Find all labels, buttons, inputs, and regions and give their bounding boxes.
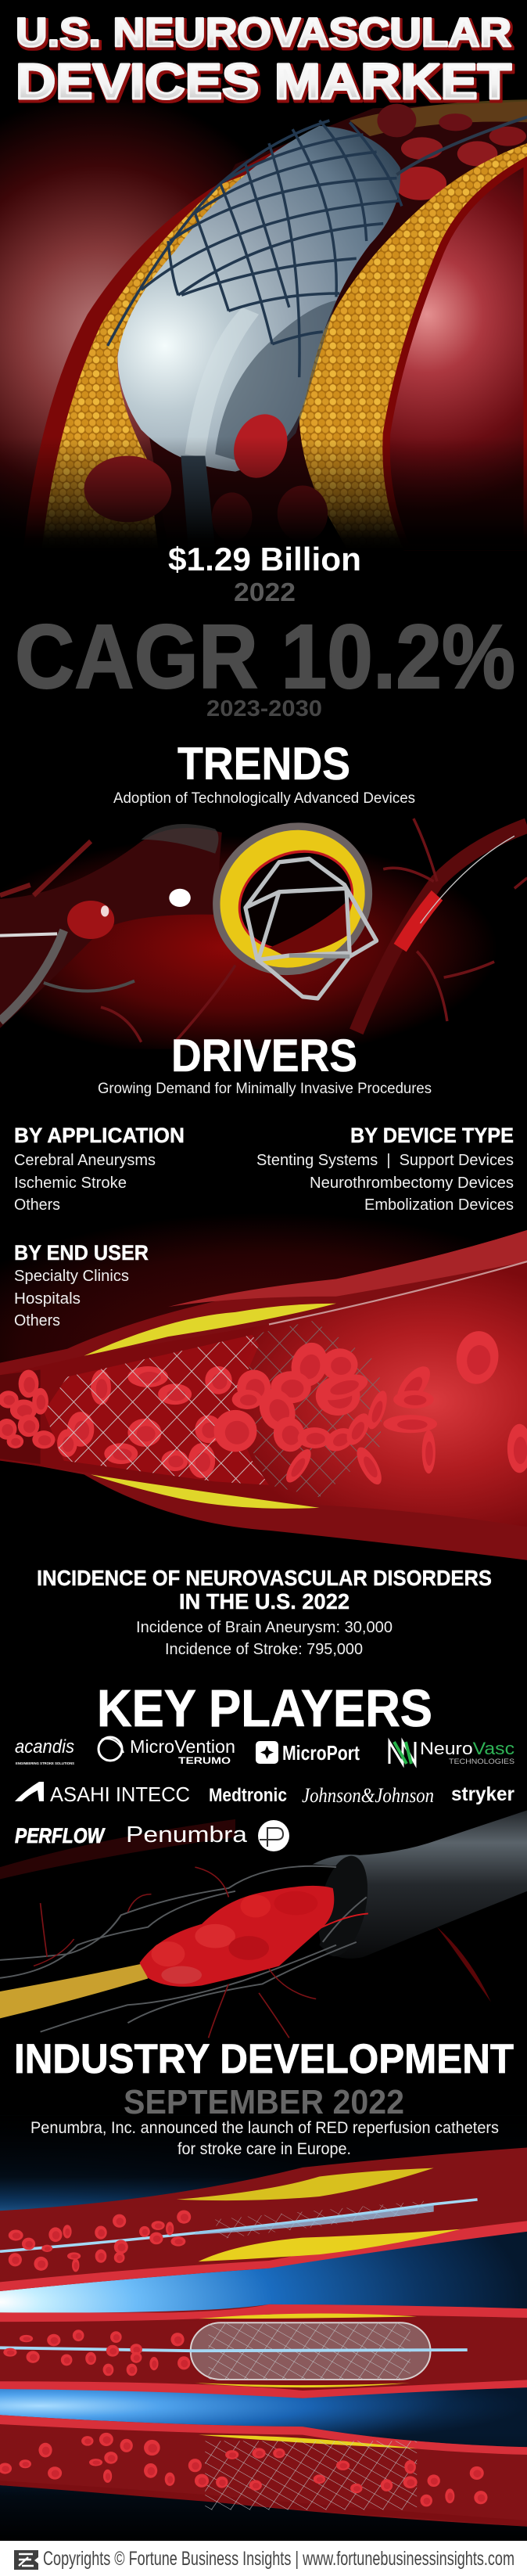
logo: MicroVention Terumo (99, 1736, 235, 1766)
heading: drivers: DRIVERS (171, 1031, 357, 1081)
title: U.S. NEUROVASCULAR (16, 10, 511, 56)
drivers text: Growing Demand for Minimally Invasive Procedures (98, 1081, 432, 1097)
logo: acandis: acandis (15, 1736, 74, 1758)
segment: by end user (14, 1241, 149, 1329)
blood cells (0, 1328, 527, 1488)
segment: by application: Ischemic Stroke (14, 1175, 127, 1192)
development text: Penumbra, Inc. announced the launch of RED reperfusion catheters (30, 2119, 499, 2137)
heading: key players: KEY PLAYERS (97, 1679, 432, 1738)
logo: NeuroVasc Technologies: Neuro Vasc (420, 1739, 514, 1758)
incidence block: IN THE U.S. 2022 (179, 1589, 350, 1614)
incidence block: INCIDENCE OF NEUROVASCULAR DISORDERS (37, 1566, 492, 1590)
logo: NeuroVasc Technologies: TECHNOLOGIES (449, 1758, 514, 1765)
segment: by device type: Neurothrombectomy Devices (310, 1175, 514, 1192)
market size value: $1.29 Billion (168, 541, 361, 577)
catheter tube (313, 1810, 527, 1959)
development text (30, 2119, 499, 2158)
stent mesh (37, 1318, 390, 1502)
right artery branches (101, 818, 527, 1042)
logo: acandis (15, 1736, 74, 1765)
forecast period: 2023-2030 (206, 696, 322, 721)
logo: acandis: ENGINEERING STROKE SOLUTIONS (16, 1761, 74, 1765)
incidence block: Incidence of Stroke: 795,000 (165, 1641, 363, 1658)
heading: trends: TRENDS (177, 739, 350, 790)
segment: by end user: Others (14, 1312, 60, 1329)
wire cage (0, 1866, 367, 2032)
illustration: clot retrieval catheter (0, 1810, 527, 2038)
segment: by end user: Specialty Clinics (14, 1268, 129, 1285)
segment: by end user: BY END USER (14, 1241, 149, 1265)
logo: Medtronic: Medtronic (209, 1785, 287, 1806)
logo: Johnson and Johnson: Johnson&Johnson (302, 1784, 434, 1807)
logo: Perflow: PERFLOW (15, 1824, 106, 1847)
segment: by application: Cerebral Aneurysms (14, 1152, 156, 1169)
title: DEVICES MARKET (16, 53, 511, 110)
segment: by application: BY APPLICATION (14, 1124, 185, 1147)
red blood cells (84, 405, 328, 541)
segment: by device type: BY DEVICE TYPE (350, 1124, 514, 1147)
icon: Fortune Business Insights logo (14, 2550, 38, 2570)
illustration: arteries with balloon and stent (0, 2115, 527, 2541)
segment: by device type: Stenting Systems | Support Devices (256, 1152, 514, 1169)
illustration: balloon stent inside artery (0, 98, 527, 581)
illustration: stent with red blood cells (0, 1213, 527, 1562)
date: september 2022: SEPTEMBER 2022 (124, 2083, 404, 2121)
base year: 2022 (234, 577, 296, 606)
footer (0, 2541, 527, 2576)
illustration: stent in occluded vessel (0, 800, 527, 1049)
segment: by device type (256, 1124, 514, 1214)
logo: Stryker: stryker (451, 1783, 514, 1805)
artery top (0, 2147, 527, 2291)
stent frame (246, 858, 377, 998)
logo: MicroVention Terumo: MicroVention (130, 1736, 235, 1757)
gold guide wire (0, 1963, 148, 2018)
segment: by application (14, 1124, 185, 1214)
balloon and stent mesh (108, 117, 527, 472)
incidence block: Incidence of Brain Aneurysm: 30,000 (136, 1619, 393, 1636)
segment: by device type: Embolization Devices (364, 1196, 514, 1214)
development text: for stroke care in Europe. (177, 2140, 351, 2158)
logo: NeuroVasc Technologies (389, 1739, 514, 1765)
blood clot (139, 1886, 334, 1987)
artery bottom with stent (0, 2415, 527, 2527)
incidence block (37, 1566, 492, 1658)
logo: Penumbra: Penumbra (126, 1822, 248, 1847)
title (16, 10, 511, 110)
logo: MicroVention Terumo: TERUMO (178, 1755, 231, 1766)
artery middle with balloon (0, 2304, 527, 2398)
segment: by end user: Hospitals (14, 1290, 81, 1308)
vessel cross-section with plaque (192, 800, 393, 998)
logo: MicroPort: MicroPort (282, 1741, 360, 1765)
trends text: Adoption of Technologically Advanced Devices (113, 790, 415, 807)
catheter (181, 456, 215, 548)
logo: MicroPort (256, 1741, 360, 1765)
segment: by application: Others (14, 1196, 60, 1214)
logo: Penumbra (126, 1820, 289, 1851)
logo: Asahi Intecc: ASAHI INTECC (50, 1783, 190, 1806)
company logos (15, 1736, 514, 1851)
